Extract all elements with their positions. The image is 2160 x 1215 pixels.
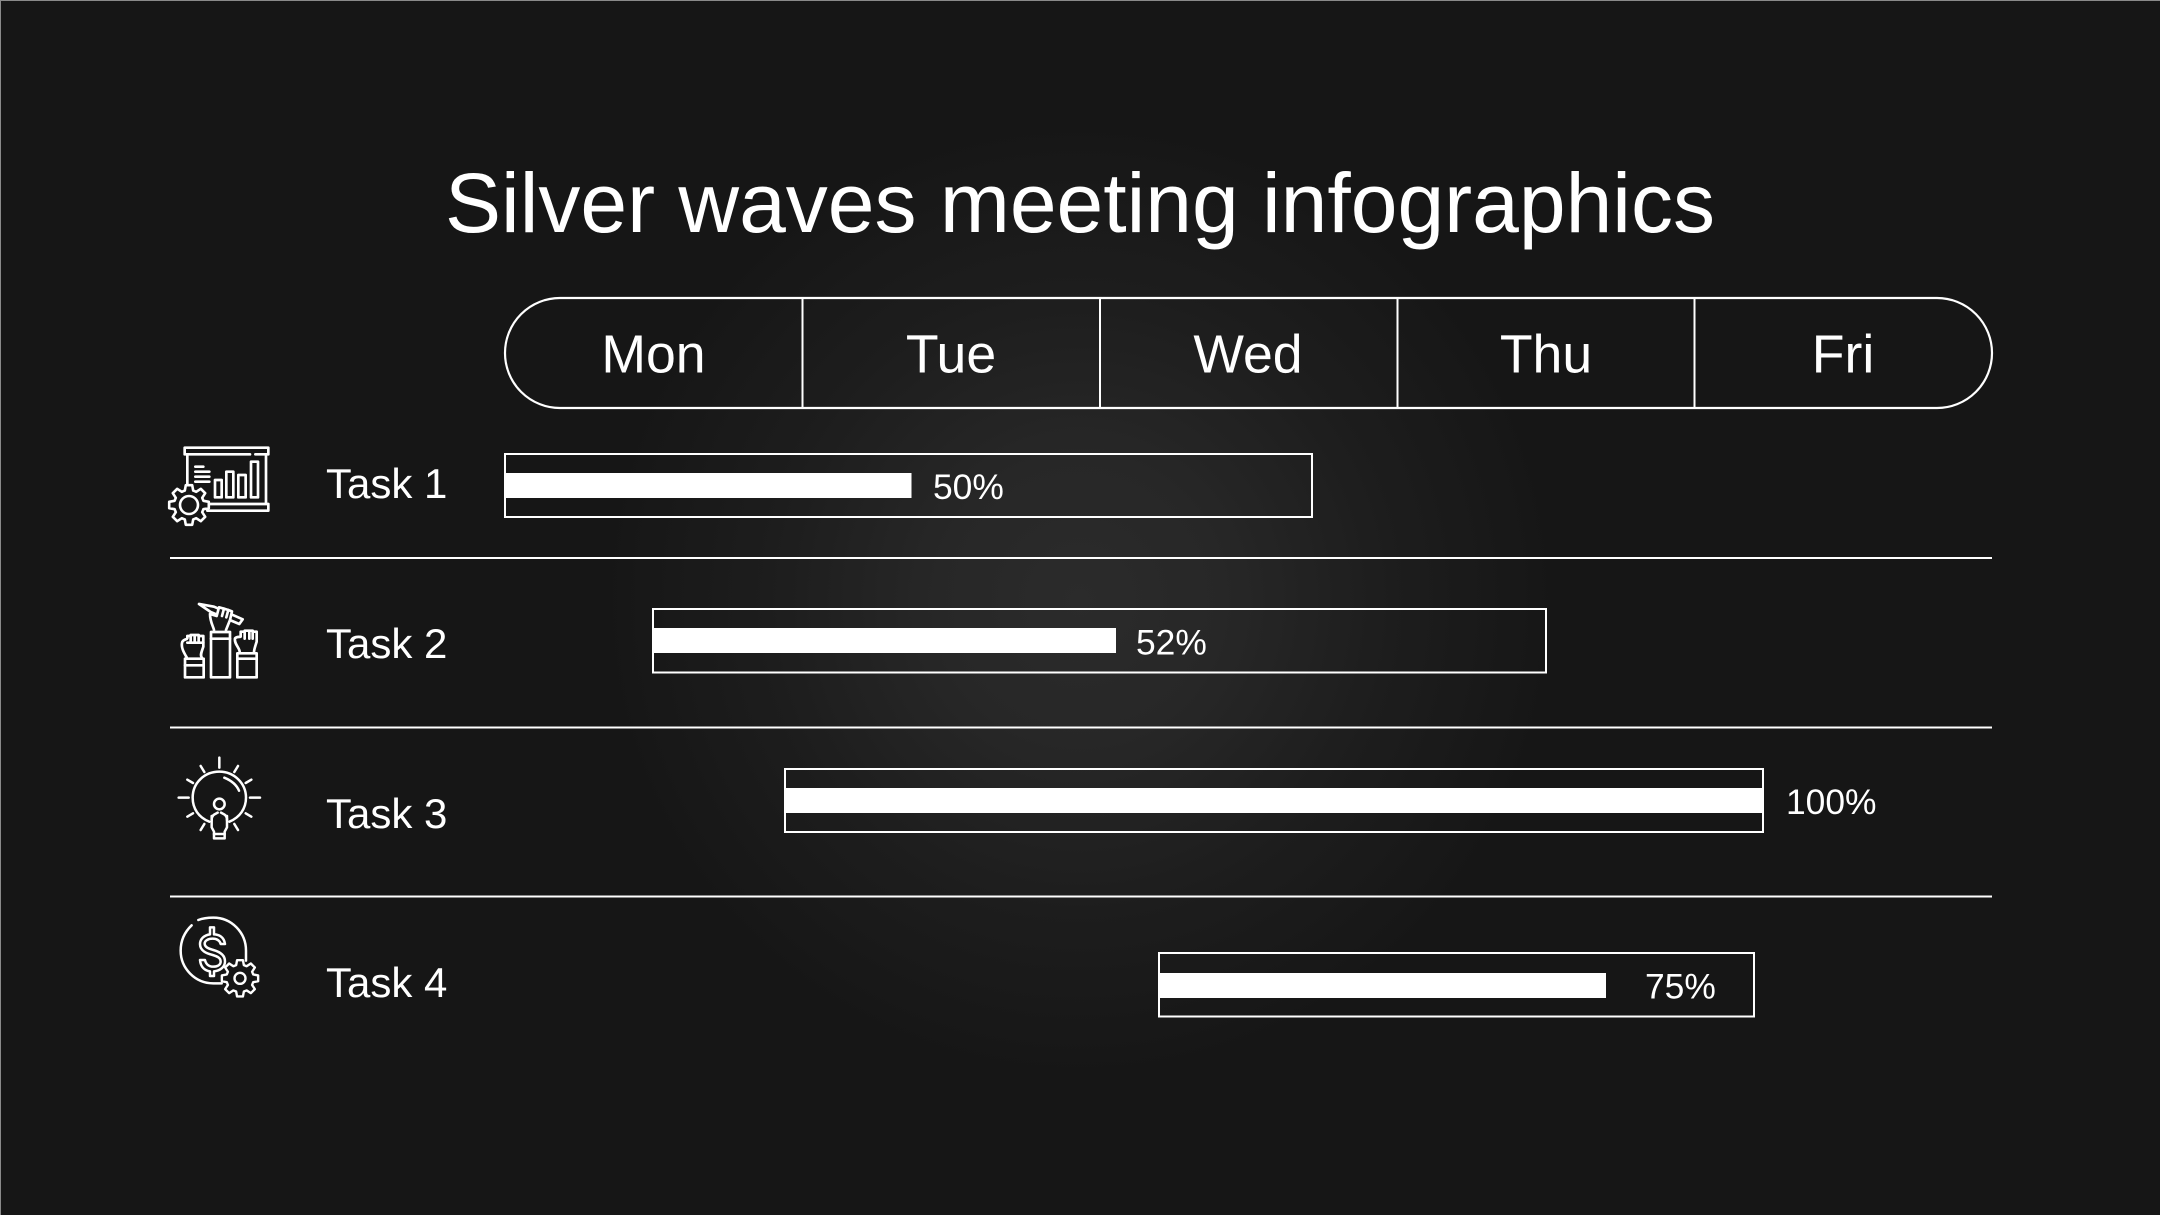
weekday labels: Fri	[1812, 324, 1874, 384]
weekday labels	[601, 324, 1874, 384]
value: 100%: 100%	[1786, 782, 1877, 822]
label: Task 2: Task 2	[326, 620, 447, 667]
weekday labels: Mon	[601, 324, 706, 384]
panel: weekday header	[505, 298, 1992, 408]
value: 52%: 52%	[1136, 622, 1207, 662]
row: task 1	[169, 448, 1312, 525]
weekday pill outline	[505, 298, 1992, 408]
icon: dollar coin with gear	[181, 918, 258, 996]
weekday labels: Tue	[906, 324, 996, 384]
title: Silver waves meeting infographics	[445, 156, 1715, 250]
bar frame and fill: Task 2	[653, 609, 1546, 672]
label: Task 1: Task 1	[326, 460, 447, 507]
row: task 4	[181, 918, 1754, 1016]
bar frame and fill: Task 1	[505, 454, 1312, 517]
icon: light bulb with person	[179, 758, 260, 838]
label: Task 4: Task 4	[326, 959, 447, 1006]
label: Task 3: Task 3	[326, 790, 447, 837]
row: task 2	[182, 604, 1546, 677]
value: 75%: 75%	[1645, 966, 1716, 1006]
bar frame and fill: Task 4	[1159, 953, 1754, 1016]
value: 50%: 50%	[933, 467, 1004, 507]
weekday labels: Thu	[1500, 324, 1592, 384]
row: task 3	[179, 758, 1877, 838]
icon: presentation board with gear	[169, 448, 268, 525]
weekday labels: Wed	[1193, 324, 1303, 384]
bar frame and fill: Task 3	[785, 769, 1763, 832]
icon: raised hands with pen	[182, 604, 257, 677]
